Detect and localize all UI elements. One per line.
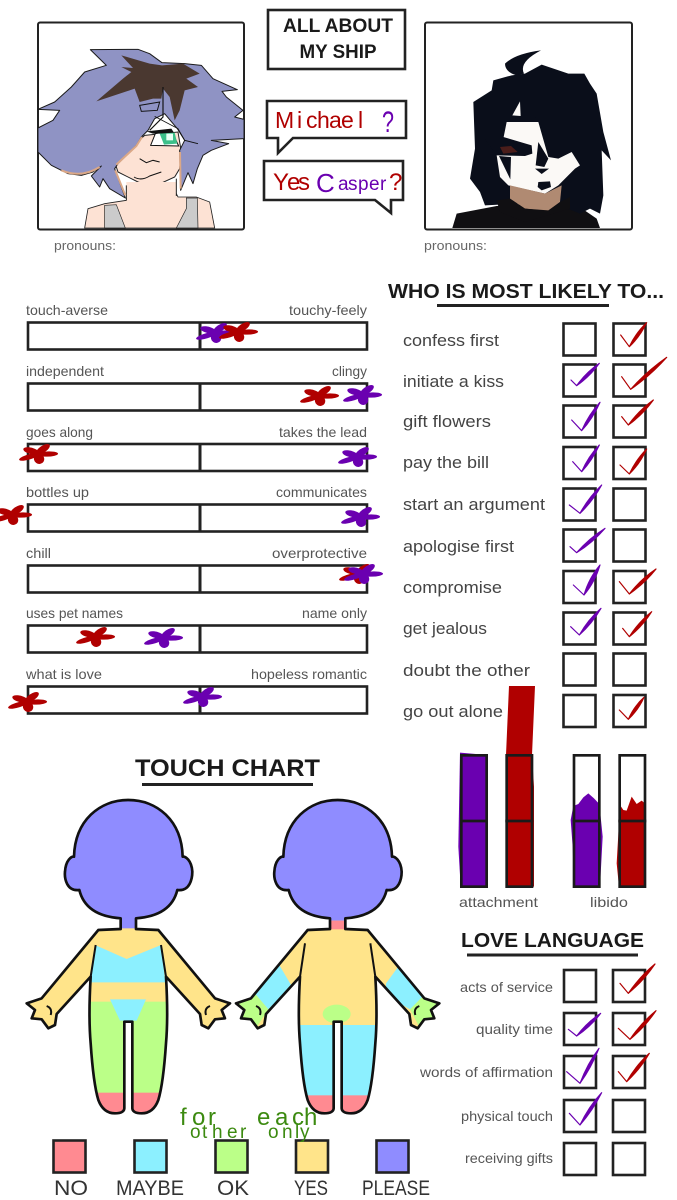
speech bubble: Yes Casper: ? (389, 169, 402, 196)
legend: touch chart: NO (54, 1177, 88, 1200)
handwritten note: for each other only (180, 1104, 317, 1143)
slider: touch-averse to touchy-feely (26, 302, 367, 350)
bars: attachment and libido (458, 686, 646, 910)
title box: MY SHIP (300, 42, 377, 63)
legend: touch chart: MAYBE (116, 1177, 184, 1200)
portrait: Casper (425, 22, 632, 230)
checklist: who is most likely to (403, 323, 667, 727)
slider: goes along to takes the lead: takes the lead (279, 424, 367, 440)
checklist: who is most likely to: gift flowers (403, 412, 491, 431)
slider: touch-averse to touchy-feely: touch-averse (26, 302, 108, 318)
speech bubble: Michael: Michael (275, 107, 363, 133)
checklist: who is most likely to: go out alone (403, 702, 503, 721)
slider: goes along to takes the lead: goes along (26, 424, 93, 440)
checklist: who is most likely to: pay the bill (403, 453, 489, 472)
legend: touch chart: PLEASE (362, 1177, 430, 1200)
slider: bottles up to communicates: communicates (276, 484, 367, 500)
slider: chill to overprotective: overprotective (272, 545, 367, 561)
checklist: who is most likely to: doubt the other (403, 661, 530, 680)
checklist: who is most likely to: initiate a kiss (403, 372, 504, 391)
slider: independent to clingy: independent (26, 363, 104, 379)
checklist: who is most likely to: compromise (403, 578, 502, 597)
checklist: love language: physical touch (461, 1108, 553, 1124)
checklist: who is most likely to: apologise first (403, 537, 514, 556)
checklist: who is most likely to: get jealous (403, 619, 487, 638)
speech bubble: Yes Casper: C (316, 168, 335, 198)
speech bubble: Yes Casper (264, 161, 403, 213)
portrait: Michael (38, 22, 244, 230)
slider: what is love to hopeless romantic: hopeless romantic (251, 666, 367, 682)
handwritten note: for each other only: for each (180, 1104, 317, 1131)
slider: uses pet names to name only: uses pet names (26, 605, 123, 621)
checklist: love language (419, 964, 656, 1175)
legend: touch chart: OK (217, 1177, 249, 1200)
slider: bottles up to communicates: bottles up (26, 484, 89, 500)
speech bubble: Michael (267, 101, 406, 153)
heading: love language: LOVE LANGUAGE (461, 930, 644, 952)
speech bubble: Yes Casper: asper (338, 174, 387, 195)
body figure: front (20, 797, 240, 1117)
checklist: love language: receiving gifts (465, 1150, 553, 1166)
speech bubble: Michael: ? (382, 106, 394, 139)
legend: touch chart (54, 1140, 430, 1200)
slider: chill to overprotective (26, 545, 387, 593)
title box (268, 10, 405, 69)
slider: bottles up to communicates (0, 484, 384, 532)
body figure: back (229, 797, 449, 1117)
pronouns label left: pronouns: (54, 238, 116, 253)
handwritten note: for each other only: otheronly (190, 1122, 310, 1143)
pronouns label right: pronouns: (424, 238, 487, 253)
checklist: who is most likely to: start an argument (403, 495, 545, 514)
checklist: love language: words of affirmation (419, 1064, 553, 1080)
speech bubble: Yes Casper: Yes (273, 169, 310, 196)
slider: touch-averse to touchy-feely: touchy-feely (289, 302, 367, 318)
bars: attachment and libido: libido (590, 894, 628, 910)
slider: uses pet names to name only (26, 605, 367, 653)
legend: touch chart: YES (294, 1177, 328, 1200)
heading: touch chart: TOUCH CHART (135, 755, 320, 782)
slider: uses pet names to name only: name only (302, 605, 367, 621)
checklist: who is most likely to: confess first (403, 331, 499, 350)
slider: independent to clingy (26, 363, 386, 411)
bars: attachment and libido: attachment (459, 894, 538, 910)
checklist: love language: acts of service (460, 979, 553, 995)
slider: what is love to hopeless romantic (4, 666, 367, 714)
slider: what is love to hopeless romantic: what is love (25, 666, 102, 682)
checklist: love language: quality time (476, 1021, 553, 1037)
slider: goes along to takes the lead (15, 424, 381, 471)
heading: who is most likely to: WHO IS MOST LIKELY TO... (388, 281, 664, 303)
title box: ALL ABOUT (283, 16, 393, 37)
slider: independent to clingy: clingy (332, 363, 367, 379)
slider: chill to overprotective: chill (26, 545, 51, 561)
